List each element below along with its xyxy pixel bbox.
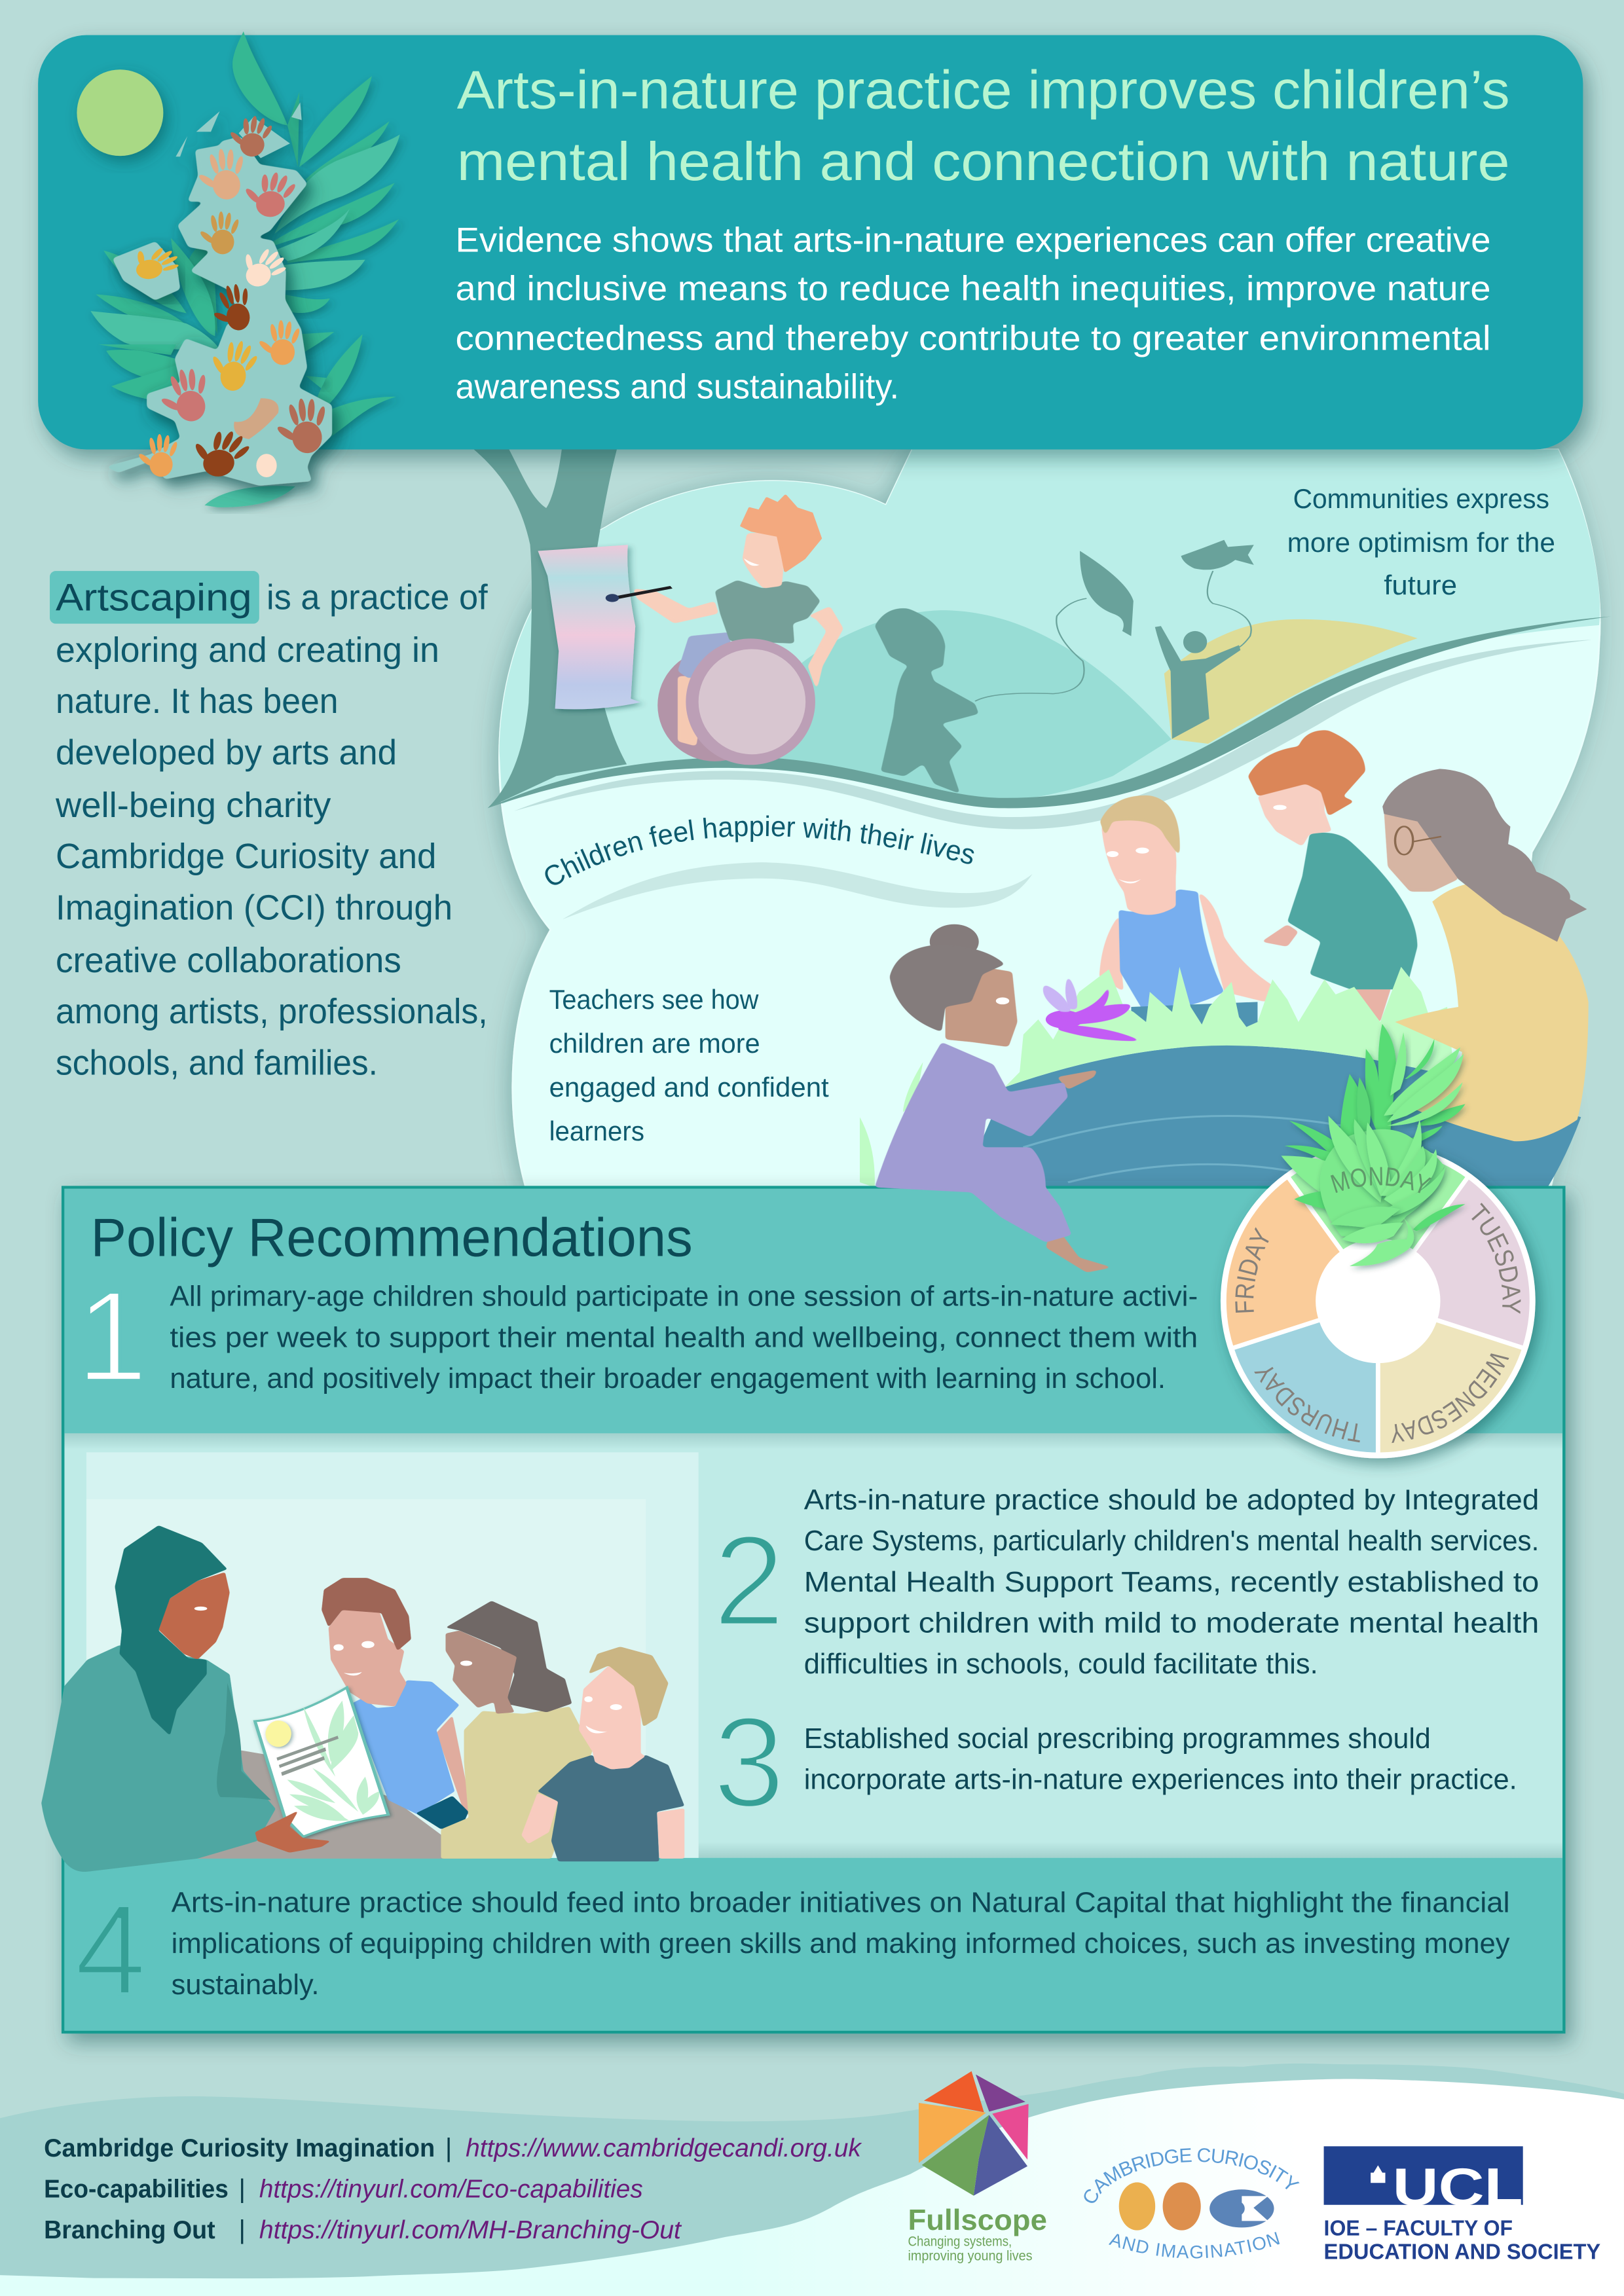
pond <box>979 1046 1581 1188</box>
day labels: FRIDAY <box>1235 1227 1269 1313</box>
light ground band <box>514 640 1592 829</box>
recommendation 2: Arts-in-nature practice should be adopted by Integrated <box>804 1484 1539 1516</box>
recommendation 1: ties per week to support their mental health and wellbeing, connect them with <box>170 1321 1198 1353</box>
intro paragraph: and inclusive means to reduce health inequities, improve nature <box>455 269 1490 308</box>
caption: communities: future <box>1384 570 1457 600</box>
bottom band <box>64 1858 1562 2031</box>
caption: teachers: learners <box>549 1116 644 1146</box>
title <box>457 59 1510 192</box>
recommendation 3: incorporate arts-in-nature experiences into their practice. <box>804 1764 1517 1796</box>
intro paragraph: awareness and sustainability. <box>455 367 899 406</box>
logo: UCL: IOE – FACULTY OF <box>1324 2217 1513 2241</box>
grey lap <box>198 1751 473 1859</box>
caption: communities: more optimism for the <box>1287 527 1555 558</box>
tree <box>469 445 627 808</box>
reference links: | <box>239 2174 246 2204</box>
Artscaping highlight <box>50 571 259 624</box>
header panel <box>38 35 1583 450</box>
heading: Policy Recommendations <box>91 1207 693 1268</box>
yellow sun hill <box>1164 619 1418 744</box>
logo: UCL: UCL <box>1393 2158 1523 2217</box>
reference links: https://www.cambridgecandi.org.uk <box>466 2134 862 2162</box>
scene background blob <box>499 450 1600 1188</box>
recommendation 1: 1 <box>76 1264 148 1408</box>
girl with red hair <box>1248 730 1418 1022</box>
illustration: adult showing leaflet to three people <box>41 1525 684 1872</box>
reference links: https://tinyurl.com/MH-Branching-Out <box>259 2216 682 2244</box>
caption: children feel happier: Children feel happier with their lives <box>545 816 974 885</box>
segment: Friday <box>1224 1176 1342 1349</box>
title: Arts-in-nature practice improves children’s <box>457 59 1510 120</box>
caption: teachers: children are more <box>549 1028 760 1059</box>
pond and people around it <box>860 730 1589 1188</box>
Artscaping description: creative collaborations <box>56 941 401 980</box>
intro paragraph: Evidence shows that arts-in-nature experiences can offer creative <box>455 221 1490 260</box>
adult in hijab <box>41 1525 276 1872</box>
logo: UCL <box>1324 2146 1600 2265</box>
segment: Thursday <box>1232 1320 1378 1455</box>
caption: teachers: engaged and confident <box>549 1072 829 1102</box>
handprints <box>121 113 331 483</box>
recommendation 1: nature, and positively impact their broader engagement with learning in school. <box>170 1362 1166 1394</box>
green bush over Monday segment <box>1281 1024 1468 1272</box>
day labels: TUESDAY <box>1471 1203 1521 1314</box>
boy in blue vest <box>1099 795 1283 1010</box>
recommendation 3 <box>713 1690 1517 1834</box>
Artscaping description: exploring and creating in <box>56 630 439 670</box>
reference links: https://tinyurl.com/Eco-capabilities <box>259 2176 643 2204</box>
segment: Tuesday <box>1413 1176 1532 1349</box>
intro paragraph: connectedness and thereby contribute to greater environmental <box>455 319 1490 357</box>
woman with dark hair <box>441 1601 593 1859</box>
dragonfly <box>1043 976 1141 1041</box>
UK outline <box>108 103 331 484</box>
wheel centre <box>1318 1241 1438 1361</box>
title: mental health and connection with nature <box>457 131 1510 192</box>
leaflet <box>255 1688 388 1836</box>
woman with glasses <box>1382 769 1589 1141</box>
Artscaping description: Artscaping <box>56 577 252 619</box>
logo: Fullscope: improving young lives <box>908 2248 1033 2264</box>
blond child <box>521 1647 684 1861</box>
UK map with handprints <box>108 103 331 484</box>
intro paragraph <box>455 221 1490 406</box>
child painting in wheelchair <box>538 496 843 765</box>
top band <box>64 1189 1562 1433</box>
recommendation 2: 2 <box>713 1508 784 1652</box>
footer background waves <box>0 2064 1624 2296</box>
recommendation 2: support children with mild to moderate mental health <box>804 1607 1539 1639</box>
caption: teachers <box>549 984 829 1146</box>
Artscaping description <box>55 577 488 1082</box>
Monday label: MONDAY <box>1331 1167 1431 1193</box>
caption: communities <box>1287 483 1555 600</box>
Artscaping description: developed by arts and <box>56 733 397 772</box>
silhouettes: girl with leaf kite, figure with fish kite <box>875 540 1254 794</box>
panel: policy recommendations <box>63 1188 1564 2032</box>
logo: Fullscope: Changing systems, <box>908 2233 1012 2249</box>
boy with brown hair <box>322 1578 473 1829</box>
Artscaping description: among artists, professionals, <box>56 992 488 1031</box>
recommendation 4: 4 <box>75 1878 146 2022</box>
picture backdrop <box>86 1452 699 1858</box>
leaves behind UK map <box>90 31 400 507</box>
logo: UCL: EDUCATION AND SOCIETY <box>1324 2240 1600 2265</box>
sitting child with purple outfit <box>875 924 1113 1273</box>
top band shadow <box>64 1433 1562 1449</box>
recommendation 4: sustainably. <box>172 1969 320 2001</box>
upper sky area <box>500 450 1600 804</box>
day labels <box>1235 1203 1521 1443</box>
day labels: WEDNESDAY <box>1392 1353 1509 1443</box>
swoosh under caption <box>563 862 1033 919</box>
Artscaping description: Cambridge Curiosity and <box>56 837 436 876</box>
reference links <box>44 2133 862 2244</box>
recommendation 1: All primary-age children should participate in one session of arts-in-nature activi- <box>170 1281 1198 1313</box>
Artscaping description: Imagination (CCI) through <box>56 888 452 927</box>
logo: Fullscope: Fullscope <box>908 2204 1047 2236</box>
recommendation 2 <box>713 1484 1539 1680</box>
recommendation 4: Arts-in-nature practice should feed into broader initiatives on Natural Capital that highlight the financial <box>172 1887 1510 1919</box>
Artscaping description: schools, and families. <box>56 1043 378 1082</box>
reference links: Cambridge Curiosity Imagination <box>44 2134 435 2162</box>
recommendation 2: Mental Health Support Teams, recently established to <box>804 1566 1539 1598</box>
segment: Monday <box>1287 1147 1468 1252</box>
recommendation 4 <box>75 1878 1510 2022</box>
recommendation 2: Care Systems, particularly children's mental health services. <box>804 1525 1539 1557</box>
logo: Cambridge Curiosity and Imagination: CAMBRIDGE CURIOSITY <box>1084 2148 1299 2203</box>
caption: teachers: Teachers see how <box>549 984 759 1015</box>
logo: Cambridge Curiosity and Imagination <box>1084 2148 1299 2259</box>
segment: Wednesday <box>1378 1320 1524 1455</box>
Artscaping description: is a practice of <box>267 577 488 617</box>
recommendation 3: 3 <box>713 1690 784 1834</box>
logo: Fullscope <box>908 2071 1047 2264</box>
hand holding leaflet <box>255 1810 331 1853</box>
caption: communities: Communities express <box>1293 483 1549 514</box>
reference links: | <box>239 2215 246 2244</box>
recommendation 2: difficulties in schools, could facilitate this. <box>804 1648 1318 1680</box>
day labels: THURSDAY <box>1254 1367 1360 1443</box>
Artscaping description: well-being charity <box>55 786 331 825</box>
grass <box>1005 967 1454 1087</box>
illustration scene: communities, children and teachers <box>469 445 1611 1188</box>
weekly wheel <box>1217 1149 1547 1473</box>
bottom band shadow <box>699 1842 1562 1858</box>
recommendation 4: implications of equipping children with green skills and making informed choices, such as investing money <box>172 1927 1510 1959</box>
recommendation 1 <box>76 1264 1198 1408</box>
ground wave line <box>488 616 1611 808</box>
green hill <box>756 610 1172 801</box>
Artscaping description: nature. It has been <box>56 682 339 721</box>
logo: Cambridge Curiosity and Imagination: AND IMAGINATION <box>1109 2232 1280 2259</box>
sun circle <box>77 69 163 156</box>
reference links: | <box>445 2133 452 2162</box>
reference links: Branching Out <box>44 2216 215 2244</box>
recommendation 3: Established social prescribing programmes should <box>804 1722 1431 1755</box>
reference links: Eco-capabilities <box>44 2176 229 2204</box>
